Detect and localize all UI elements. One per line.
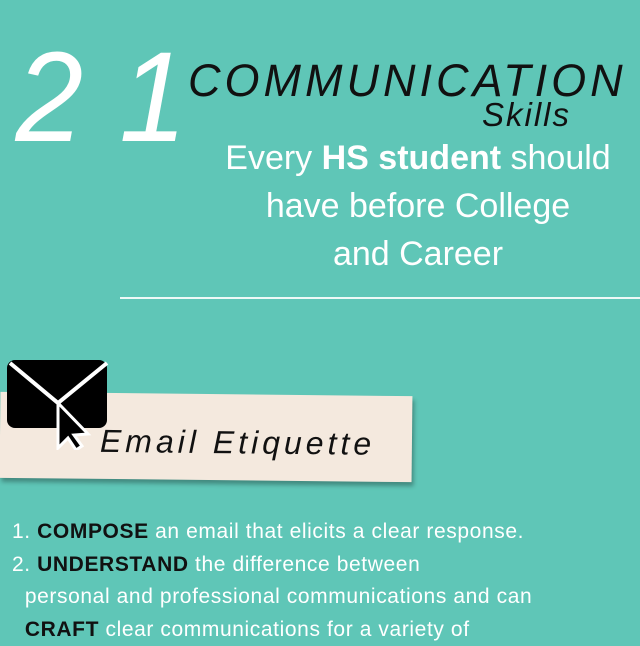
- banner text: Email Etiquette: [100, 423, 375, 462]
- subtitle: and Career: [333, 235, 503, 273]
- numbered list: 1. COMPOSE an email that elicits a clear response.: [12, 520, 524, 543]
- subtitle: [225, 139, 611, 273]
- icon: envelope with cursor: [7, 360, 108, 450]
- big number 21: 21: [15, 26, 223, 169]
- numbered list: CRAFT clear communications for a variety of: [25, 618, 470, 640]
- numbered list: [12, 520, 532, 640]
- numbered list: personal and professional communications and can: [25, 585, 532, 608]
- numbered list: 2. UNDERSTAND the difference between: [12, 552, 420, 576]
- banner: email etiquette: [0, 392, 412, 482]
- subtitle: have before College: [266, 187, 570, 225]
- title: COMMUNICATION: [188, 55, 627, 106]
- title: Skills: Skills: [482, 96, 571, 133]
- subtitle: Every HS student should: [225, 139, 611, 177]
- divider: [120, 297, 640, 299]
